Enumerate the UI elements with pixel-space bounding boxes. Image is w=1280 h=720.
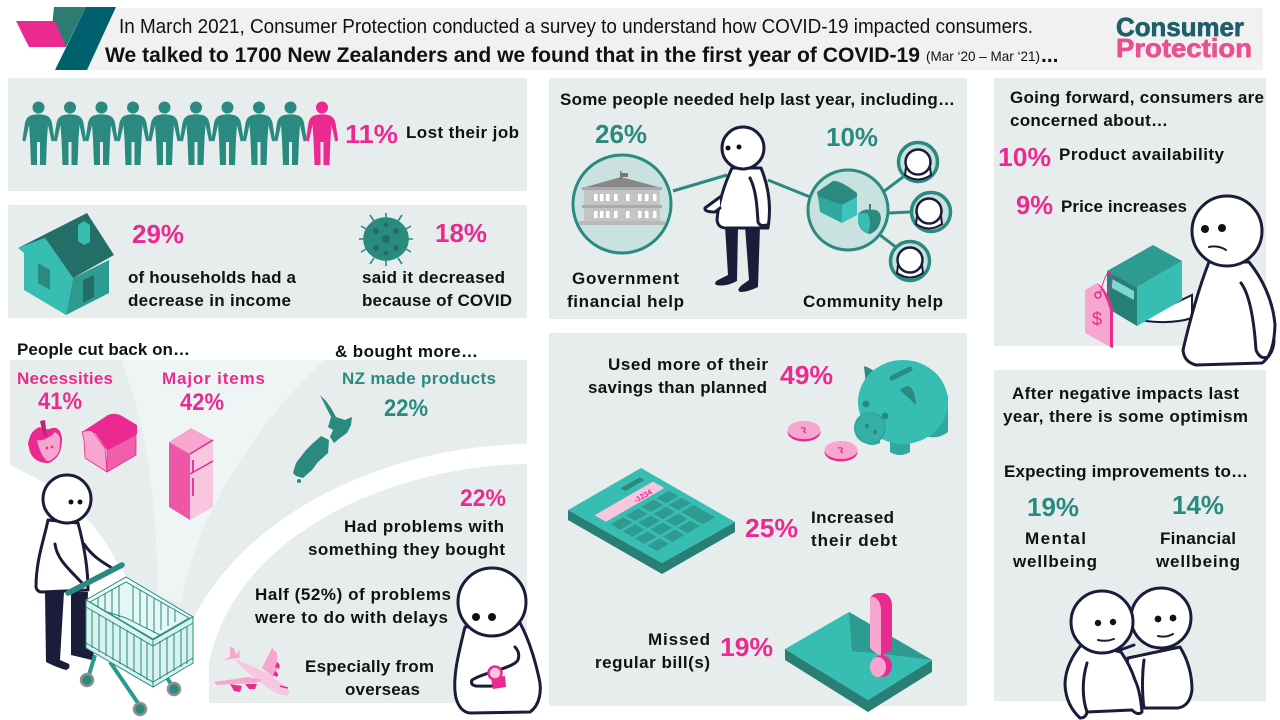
stat 41%: 41%	[38, 388, 82, 415]
icon: house	[18, 213, 114, 315]
label major items: Major items	[162, 369, 265, 388]
label delays	[254, 585, 451, 627]
label households: of households had a	[128, 268, 297, 287]
stat 22% NZ: 22%	[384, 395, 428, 422]
stat 9% prices: 9%	[1016, 190, 1053, 220]
panel: lost job	[8, 78, 527, 191]
label problems	[308, 517, 505, 559]
stat 25%: 25%	[745, 513, 798, 543]
label NZ made: NZ made products	[342, 369, 496, 388]
label financial wellbeing	[1155, 529, 1240, 571]
figure: two smiling people	[1065, 588, 1192, 718]
survey intro line: In March 2021, Consumer Protection conducted a survey to understand how COVID-19 impacted consumers.	[119, 16, 1033, 38]
label delays: were to do with delays	[254, 608, 448, 627]
label availability: Product availability	[1059, 145, 1225, 164]
stat 11%: 11%	[345, 119, 398, 149]
icon: banner chevrons	[16, 7, 116, 70]
stat 49%: 49%	[780, 360, 833, 390]
label delays: Half (52%) of problems	[255, 585, 451, 604]
icon: calculator: -1234	[632, 487, 654, 505]
label problems: something they bought	[308, 540, 505, 559]
pictogram: ten people	[22, 102, 338, 165]
panel: shopping background	[10, 360, 527, 625]
ellipsis: ...	[1041, 44, 1059, 67]
subheading improvements: Expecting improvements to…	[1004, 462, 1248, 481]
heading going forward: concerned about…	[1010, 111, 1168, 130]
icon: bread	[82, 414, 137, 472]
icon: community food circle	[808, 170, 888, 250]
label prices: Price increases	[1061, 197, 1187, 216]
label households	[128, 268, 297, 310]
label debt	[811, 508, 897, 550]
survey period: (Mar ‘20 – Mar ‘21)	[926, 48, 1040, 64]
label households: decrease in income	[128, 291, 291, 310]
label savings: savings than planned	[588, 378, 767, 397]
icon: price tag	[1085, 272, 1113, 348]
label savings	[588, 355, 768, 397]
icon: helper three	[890, 242, 930, 280]
icon: plane	[214, 647, 290, 696]
label debt: their debt	[811, 531, 897, 550]
label missed bill: regular bill(s)	[595, 653, 710, 672]
heading going forward	[1010, 88, 1264, 130]
label necessities: Necessities	[17, 369, 113, 388]
panel: household income	[8, 205, 527, 318]
trolley	[68, 565, 193, 715]
shopper arms	[55, 544, 112, 584]
label financial wellbeing: wellbeing	[1155, 552, 1240, 571]
panel: going forward	[994, 78, 1275, 365]
label missed bill	[595, 630, 710, 672]
icon: piggy bank	[855, 360, 948, 455]
panel: needed help	[549, 78, 967, 319]
stat 19% bills: 19%	[720, 632, 773, 662]
label decreased: because of COVID	[362, 291, 512, 310]
icon: NZ map	[293, 395, 352, 483]
icon: helper two	[912, 192, 950, 232]
label overseas: Especially from	[305, 657, 434, 676]
icon: watch	[488, 666, 506, 689]
stat 19% mental: 19%	[1027, 492, 1079, 522]
label problems: Had problems with	[344, 517, 504, 536]
icon: price tag: $	[1092, 309, 1102, 329]
heading needed help: Some people needed help last year, including…	[560, 90, 955, 109]
label missed bill: Missed	[648, 630, 710, 649]
stat 26%: 26%	[595, 119, 647, 149]
heading: bought more: & bought more…	[335, 342, 478, 361]
panel: problems with purchases	[209, 464, 527, 703]
figure: person checking watch	[455, 568, 540, 713]
heading going forward: Going forward, consumers are	[1010, 88, 1264, 107]
stat 42%: 42%	[180, 389, 224, 416]
stat 10%: 10%	[826, 122, 878, 152]
panel: finances	[549, 333, 967, 712]
label decreased: said it decreased	[362, 268, 505, 287]
logo	[1116, 12, 1252, 63]
icon: virus	[359, 213, 413, 266]
icon: product box	[1107, 245, 1182, 326]
heading optimism: year, there is some optimism	[1003, 407, 1248, 426]
label overseas	[305, 657, 434, 699]
heading optimism	[1003, 384, 1248, 426]
label overseas: overseas	[345, 680, 420, 699]
label decreased	[362, 268, 512, 310]
icon: envelope with exclamation	[785, 593, 932, 712]
logo: Protection	[1116, 33, 1252, 63]
heading optimism: After negative impacts last	[1012, 384, 1239, 403]
label mental wellbeing: Mental	[1025, 529, 1086, 548]
label community help: Community help	[803, 292, 943, 311]
shopper head	[43, 475, 91, 523]
survey headline: We talked to 1700 New Zealanders and we found that in the first year of COVID-19	[105, 44, 920, 67]
label mental wellbeing	[1012, 529, 1097, 571]
stat 10% availability: 10%	[998, 142, 1051, 172]
connector lines	[673, 175, 910, 248]
panel: optimism	[994, 370, 1266, 718]
figure: shopper with trolley	[36, 475, 193, 715]
stat 18%: 18%	[435, 218, 487, 248]
label mental wellbeing: wellbeing	[1012, 552, 1097, 571]
label government help	[567, 269, 684, 311]
shopper body	[36, 520, 88, 592]
label financial wellbeing: Financial	[1160, 529, 1236, 548]
icon: helper one	[898, 142, 938, 182]
label government help: Government	[572, 269, 679, 288]
icon: coin two	[824, 441, 858, 462]
label savings: Used more of their	[608, 355, 768, 374]
icon: government building	[573, 155, 671, 253]
stat 22% problems: 22%	[460, 485, 506, 512]
icon: calculator	[568, 468, 735, 574]
icon: apple	[28, 420, 62, 463]
stat 14% financial: 14%	[1172, 490, 1224, 520]
shopper legs	[45, 592, 96, 670]
figure: person in the middle	[705, 127, 770, 292]
label government help: financial help	[567, 292, 684, 311]
logo: Consumer	[1116, 12, 1244, 42]
stat 29%: 29%	[132, 219, 184, 249]
heading: people cut back: People cut back on…	[17, 340, 190, 359]
figure: worried person with box	[1140, 196, 1275, 365]
icon: coin one	[788, 421, 820, 442]
header background	[86, 8, 1263, 70]
header banner	[16, 7, 1263, 70]
label debt: Increased	[811, 508, 894, 527]
label lost job: Lost their job	[406, 123, 519, 142]
icon: fridge	[169, 428, 213, 520]
